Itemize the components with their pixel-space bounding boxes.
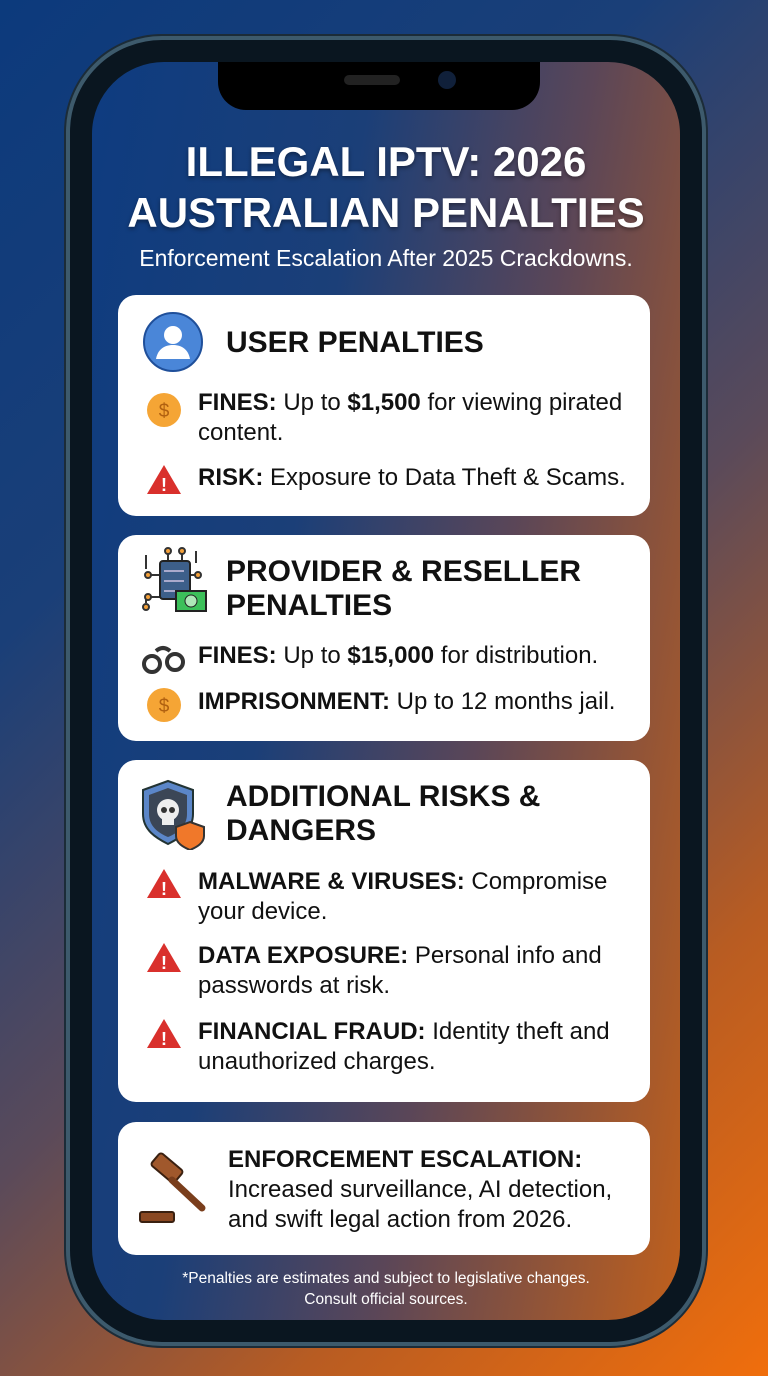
item: risk: !: [161, 475, 167, 495]
item: imprisonment: $: [159, 696, 170, 717]
item: imprisonment: IMPRISONMENT: Up to 12 months jail.: [198, 688, 615, 715]
panel: enforcement escalation: [118, 1122, 650, 1255]
item: fines: content.: [198, 419, 283, 446]
icon: server: [142, 547, 207, 612]
phone frame: [66, 36, 706, 1346]
item: malware: !: [161, 879, 167, 899]
heading: [226, 555, 581, 622]
heading: PROVIDER & RESELLER: [226, 555, 581, 588]
footer note: *Penalties are estimates and subject to legislative changes.: [182, 1270, 590, 1287]
item: financial fraud: [147, 1018, 610, 1075]
phone screen: [92, 62, 680, 1320]
subtitle: Enforcement Escalation After 2025 Crackdowns.: [139, 245, 633, 271]
item: data exposure: DATA EXPOSURE: Personal info and: [198, 942, 602, 969]
title: AUSTRALIAN PENALTIES: [127, 189, 645, 236]
heading: [226, 780, 540, 847]
panel: additional risks: [118, 760, 650, 1102]
text: and swift legal action from 2026.: [228, 1206, 572, 1233]
panel: provider penalties: [118, 535, 650, 741]
heading: DANGERS: [226, 814, 376, 847]
icon: user: [143, 312, 203, 372]
heading: USER PENALTIES: [226, 326, 484, 359]
item: fines: $: [159, 401, 170, 422]
text: ENFORCEMENT ESCALATION:: [228, 1146, 582, 1173]
item: financial fraud: unauthorized charges.: [198, 1048, 436, 1075]
item: fines: [147, 389, 622, 446]
item: fines: FINES: Up to $15,000 for distribution.: [198, 642, 598, 669]
item: data exposure: [147, 942, 602, 999]
icon: shield skull: [142, 780, 205, 850]
text: Increased surveillance, AI detection,: [228, 1176, 612, 1203]
item: financial fraud: !: [161, 1029, 167, 1049]
item: fines: FINES: Up to $1,500 for viewing pirated: [198, 389, 622, 416]
item: malware: [147, 868, 607, 925]
title: [127, 138, 645, 236]
icon: gavel: [139, 1152, 206, 1223]
item: malware: your device.: [198, 898, 327, 925]
text: [228, 1146, 612, 1233]
item: risk: RISK: Exposure to Data Theft & Scams.: [198, 464, 626, 491]
item: malware: MALWARE & VIRUSES: Compromise: [198, 868, 607, 895]
footer note: Consult official sources.: [304, 1291, 468, 1308]
panel: user penalties: [118, 295, 650, 516]
item: data exposure: !: [161, 953, 167, 973]
item: data exposure: passwords at risk.: [198, 972, 390, 999]
item: financial fraud: FINANCIAL FRAUD: Identity theft and: [198, 1018, 610, 1045]
footer note: [182, 1270, 590, 1308]
heading: ADDITIONAL RISKS &: [226, 780, 540, 813]
title: ILLEGAL IPTV: 2026: [186, 138, 586, 185]
heading: PENALTIES: [226, 589, 392, 622]
notch: [218, 62, 540, 110]
